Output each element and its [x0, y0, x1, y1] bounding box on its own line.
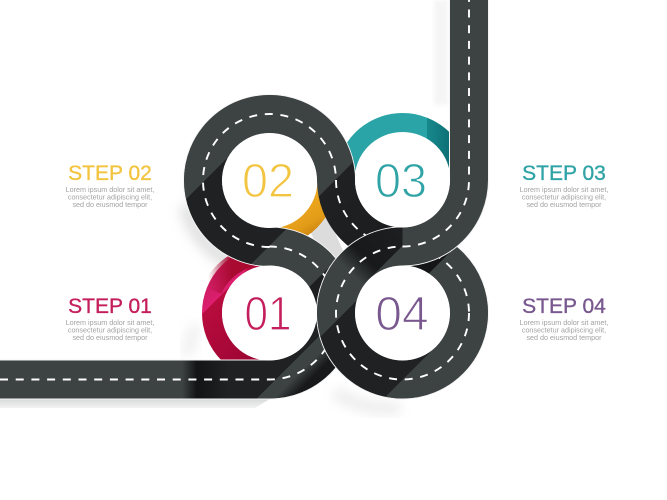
ring: step 01 crimson	[212, 256, 327, 370]
road: entry and loop 01	[0, 246, 336, 380]
number discs	[222, 132, 450, 360]
text: step 04: Lorem ipsum dolor sit amet,	[520, 318, 608, 327]
text: step 03	[520, 162, 608, 209]
text: step 01: consectetur adipiscing elit,	[68, 326, 152, 334]
gap patch between loops	[308, 212, 348, 268]
text: step 04: STEP 04	[522, 295, 606, 318]
text: step 01	[66, 295, 154, 342]
step rings	[212, 122, 460, 370]
text: step 04: consectetur adipiscing elit,	[522, 326, 606, 334]
text: step 02: STEP 02	[68, 162, 152, 185]
text: step 03: Lorem ipsum dolor sit amet,	[520, 185, 608, 194]
shadow under horizontal road	[0, 399, 270, 408]
disc 04: 04	[375, 288, 429, 341]
road: loop 04	[336, 246, 469, 380]
text: step 03: STEP 03	[522, 162, 606, 185]
disc 03	[355, 132, 450, 228]
disc 03: 03	[375, 155, 427, 208]
text: step 01: STEP 01	[68, 295, 152, 318]
text: step 02: Lorem ipsum dolor sit amet,	[66, 185, 154, 194]
winding road	[0, 0, 469, 380]
disc 01: 01	[244, 288, 292, 341]
disc 02: 02	[242, 155, 294, 208]
ring: step 02 orange	[212, 123, 327, 238]
disc 02	[222, 133, 317, 228]
text: step 04	[520, 295, 608, 342]
disc 01	[222, 266, 317, 360]
text: step 03: consectetur adipiscing elit,	[522, 192, 606, 202]
text: step 04: sed do eiusmod tempor	[526, 333, 602, 342]
road shadows	[0, 0, 448, 408]
road: loop 02	[203, 114, 336, 247]
text: step 02: consectetur adipiscing elit,	[68, 192, 152, 202]
soft shadow below loop 04	[335, 392, 400, 408]
text: step 03: sed do eiusmod tempor	[526, 200, 602, 209]
soft shadow left of loop 01	[186, 325, 196, 356]
disc 04	[355, 266, 450, 360]
soft shadow beside vertical road	[434, 0, 448, 105]
ring highlight: step 01 top	[212, 255, 270, 290]
text: step 02	[66, 162, 154, 209]
road: lower-right arc of loop 03 and exit going up	[402, 0, 469, 246]
soft shadow left of loop 02	[186, 205, 240, 266]
text: step 01: Lorem ipsum dolor sit amet,	[66, 318, 154, 327]
text: step 01: sed do eiusmod tempor	[72, 333, 148, 342]
text: step 02: sed do eiusmod tempor	[72, 200, 148, 209]
road: lower-left arc of loop 03	[336, 180, 402, 246]
ring: step 03 teal	[347, 113, 449, 171]
